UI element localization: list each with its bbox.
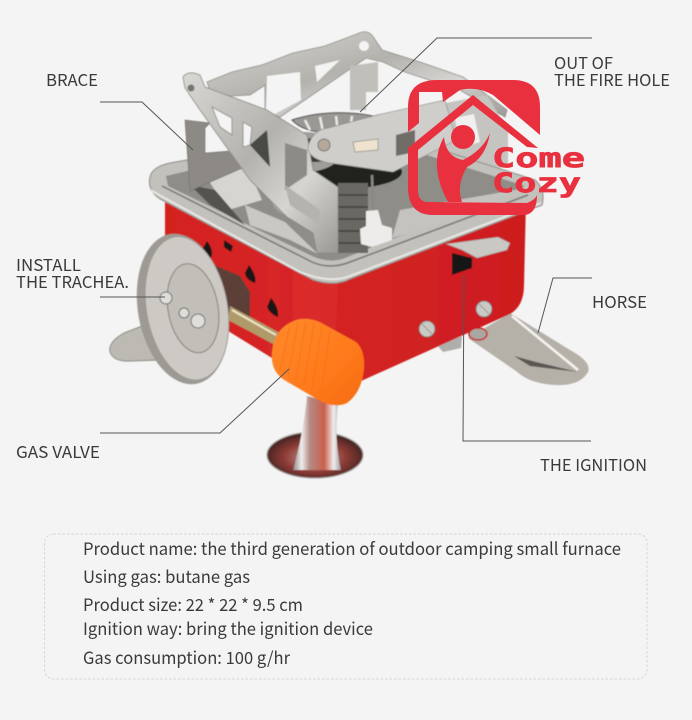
knob ribs (280, 321, 330, 394)
right rear plate window (455, 114, 480, 148)
label: install the trachea: INSTALL (16, 252, 81, 276)
logo text Cozy: Cozy (492, 168, 581, 199)
label: out of the fire hole: OUT OF (554, 50, 613, 74)
stove top surface (166, 145, 525, 261)
label: out of the fire hole: THE FIRE HOLE (554, 67, 670, 91)
foot disc (267, 432, 363, 478)
right foot bent rod (512, 316, 578, 370)
surface lower reflection (245, 205, 318, 254)
wheel screws (160, 292, 205, 328)
left foot (110, 323, 160, 361)
surface dark reflection (190, 185, 245, 225)
plate window right (396, 130, 415, 156)
right rear plate behind logo (410, 95, 508, 190)
spec: product name: Product name: the third generation of outdoor camping small furnace (83, 535, 621, 560)
label: the ignition: THE IGNITION (540, 452, 647, 476)
back bracket windows (266, 41, 369, 115)
label: gas valve: GAS VALVE (16, 439, 100, 463)
plate rivet (318, 139, 330, 151)
igniter wire (372, 175, 373, 212)
front right bracket plate (308, 100, 456, 172)
burner bowl ribs (305, 116, 352, 132)
foot stem (293, 396, 341, 470)
logo text Come: Come (492, 143, 585, 174)
stove illustration (110, 32, 589, 478)
rim shadow line (162, 186, 528, 266)
gas tab under body (437, 336, 462, 352)
rear upright leg (350, 62, 378, 110)
bracket window: burner seen through (250, 130, 270, 167)
logo person body (437, 133, 490, 202)
label: brace: BRACE (46, 67, 98, 91)
dark valve bracket (214, 265, 250, 318)
surface bright reflection (205, 168, 262, 210)
bracket pin hole (188, 84, 194, 92)
brass valve stem (228, 306, 280, 345)
burner body (269, 132, 402, 253)
spec: gas consumption: Gas consumption: 100 g/hr (83, 644, 290, 669)
part labels (16, 50, 670, 476)
right foot (468, 313, 589, 385)
label: horse: HORSE (592, 289, 647, 313)
top rim (149, 135, 543, 283)
rim edge highlight (150, 190, 541, 279)
body front corner highlight (292, 270, 338, 390)
logo person head (451, 125, 475, 149)
logo: Come Cozy (408, 80, 585, 215)
panel: product specifications (44, 534, 647, 679)
bottom leg rivet (469, 328, 487, 340)
logo roof and wall (408, 95, 538, 215)
wheel disc (125, 226, 241, 392)
bracket window right (285, 143, 307, 190)
front left bracket (183, 73, 338, 253)
stem highlight (232, 310, 276, 335)
surface right reflection (392, 190, 515, 238)
bracket window lower (285, 185, 320, 225)
spec: using gas: Using gas: butane gas (83, 563, 250, 588)
screws on right face (419, 301, 492, 337)
label: install the trachea (16, 252, 129, 293)
spec: product size: Product size: 22 * 22 * 9.5 cm (83, 591, 303, 616)
label: out of the fire hole (554, 50, 670, 91)
ignition tab (446, 237, 510, 258)
burner bowl (292, 113, 373, 132)
vent holes (202, 240, 278, 317)
plate window (353, 139, 378, 152)
right foot shadow detail (514, 356, 578, 372)
label: install the trachea: THE TRACHEA. (16, 269, 129, 293)
left upright plate (185, 120, 247, 191)
logo upper band (408, 80, 540, 135)
leader lines (100, 38, 592, 441)
ignition switch window (452, 253, 472, 275)
red body (165, 195, 526, 395)
panel border (44, 534, 647, 679)
orange knob (272, 319, 364, 405)
ceramic igniter (360, 210, 392, 247)
spec: ignition way: Ignition way: bring the ignition device (83, 615, 373, 640)
back bracket plate (207, 32, 507, 117)
